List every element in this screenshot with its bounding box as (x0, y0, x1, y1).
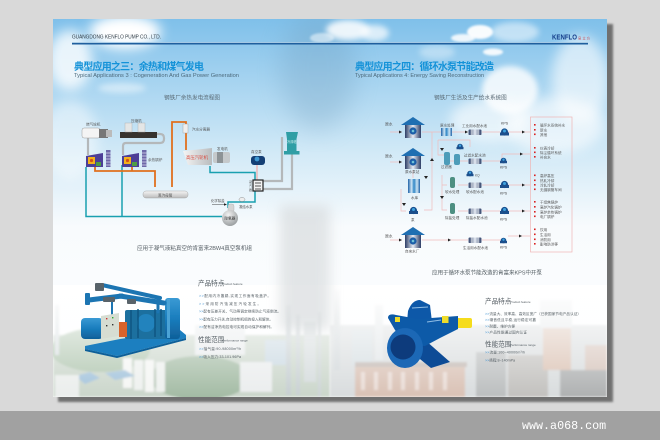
watermark url: www.a068.com (522, 419, 606, 433)
steam separator (183, 124, 210, 133)
small booster pumps: KQ (475, 174, 480, 178)
reservoir: 水库 (411, 195, 419, 200)
steam turbine: 高压汽轮机 (186, 154, 209, 161)
heading: right page: Typical Applications 4: Energy Saving Reconstruction (355, 73, 484, 79)
text block: product features, right: >>流量大、效率高、高效区宽广（已获国家节电产品认证） (485, 311, 581, 316)
chemical makeup water: 化学除盐 (211, 198, 225, 203)
spine shading (280, 10, 356, 130)
distribution pools: 除盐水配水池 (466, 215, 488, 220)
control cabinet (101, 313, 119, 339)
main body (388, 314, 458, 346)
deaerator: 除氧器 (224, 216, 236, 220)
source labels (385, 122, 393, 238)
photo: vacuum pump unit (81, 283, 186, 358)
steam turbine (183, 148, 212, 165)
KPS pumps: KPS (500, 246, 508, 250)
caption: left: 应用于凝气液粘真空的肯富来2BW4真空泵机组 (137, 244, 252, 252)
KPS pumps: KPS (500, 218, 508, 222)
generator: 发电机 (217, 146, 228, 151)
chemical makeup water (211, 198, 227, 206)
text block: product features, right: >>噪音低且平稳,运行稳定可靠 (485, 317, 536, 322)
condenser: 汽 (249, 183, 252, 188)
end user box (530, 117, 572, 252)
end user box: 高炉余热锅炉 (540, 210, 562, 214)
haze over city (53, 285, 607, 397)
cooling tower (284, 132, 300, 154)
distribution pools: 软水配水池 (466, 189, 484, 194)
diagram title: right: 钢铁厂生活及生产给水系统图 (434, 94, 507, 102)
steam header: 蒸汽母管 (158, 192, 173, 197)
upper casing (407, 300, 432, 322)
condenser (249, 179, 263, 192)
text block: product features, right: 产品特点 (485, 296, 512, 306)
intake houses: 原水泵站 (405, 169, 420, 174)
logo tagline: 泉 立 方 (578, 36, 591, 40)
text block: product features, left: 性能范围 (198, 335, 225, 344)
cooling tower: 冷却塔 (287, 139, 297, 144)
end user box: 高炉汽化锅炉 (540, 204, 562, 210)
raw water treatment (440, 122, 455, 136)
intake houses (401, 117, 425, 254)
brochure spread (42, 10, 608, 400)
text block: product features, right: >>耐磨、维护方便 (485, 324, 515, 328)
text block: product features, right: >>产品性能通过国内认证 (485, 330, 527, 334)
pipe flange (85, 293, 90, 305)
text block: product features, left: >>配用内冷靠蜗,实现工作面有吸盖护。 (199, 293, 271, 298)
valves (95, 283, 104, 291)
compressor (120, 118, 157, 138)
gas turbine: 燃气轮机 (86, 122, 101, 126)
pump casing (125, 310, 167, 339)
softening and desalination tanks: 除盐处理 (445, 215, 460, 220)
distribution pools (462, 123, 489, 250)
end user box: 电厂锅炉 (540, 214, 555, 219)
heading: left page: Typical Applications 3 : Cogeneration And Gas Power Generation (74, 73, 239, 79)
vacuum pump (251, 149, 265, 180)
coupling (119, 322, 127, 337)
text block: product features, left: Product feature (222, 282, 243, 286)
end user box: 补充水 (540, 154, 551, 160)
sky background (53, 19, 607, 397)
teal feedwater lines (86, 165, 255, 216)
deaerator (222, 204, 238, 226)
diagram title: left: 钢铁厂余热发电流程图 (164, 94, 220, 102)
end user box: 冷轧冷却 (540, 182, 555, 188)
steam header (143, 191, 188, 198)
KPS pumps: KPS (500, 192, 508, 196)
text block: product features, left: >> 采用防汽蚀减压汽轮发生。 (199, 301, 261, 306)
source labels: 原水 (385, 154, 393, 158)
text block: product features, right: >>扬程:8~140mPa (485, 358, 515, 362)
text block: product features, right (485, 296, 581, 362)
KPS pumps (500, 122, 509, 250)
text block: product features, right: Performance range (510, 343, 536, 347)
heading: right page (355, 60, 494, 79)
condenser: 凝 (249, 179, 252, 184)
generator (213, 146, 230, 163)
text block: product features, left: Performance range (222, 338, 248, 342)
text block: product features, left: >>配有压力开关,自动控制机组的投入和解体。 (199, 316, 273, 321)
photo: KPS split-case pump (387, 300, 472, 368)
header: right page (330, 34, 591, 44)
bottom band (0, 411, 660, 440)
filters: 过滤器 (441, 164, 452, 169)
reservoir pump (409, 207, 418, 222)
header rule (330, 42, 588, 44)
end user box: 循环水系统补水 (540, 122, 566, 128)
page drop shadow (58, 24, 613, 402)
end user box: 饮用 (540, 227, 548, 232)
caption: right: 应用于循环水泵节能改造的肯富来KPS中开泵 (432, 268, 542, 276)
source labels: 原水 (385, 234, 393, 238)
end user box: 影响防洪等 (540, 242, 558, 246)
separator tank (165, 298, 180, 339)
logo: KENFLO (552, 34, 577, 42)
heading: left page (74, 60, 239, 79)
end user box: 消防用 (540, 237, 551, 242)
highlights (412, 307, 441, 322)
grey wash on left page edge (280, 205, 330, 330)
text block: product features, left: >>吸入压力:33-101.96Pa (199, 354, 241, 359)
end user box: 除尘循环系统 (540, 150, 562, 155)
small booster pumps (456, 144, 480, 178)
vacuum pump: 真空泵 (251, 149, 262, 154)
intake houses: 自来水厂 (405, 248, 420, 254)
softening and desalination tanks (445, 177, 460, 220)
text block: product features, right: 性能范围 (485, 340, 512, 348)
flow arrows (399, 130, 525, 242)
text block: product features, left: >>抽气量:90-98000m³/h (199, 346, 241, 351)
motor (81, 318, 103, 339)
raw water treatment: 原水处理 (440, 122, 455, 128)
text block: product features, left (198, 278, 281, 359)
city backdrop: right page (330, 307, 607, 397)
end user box: 新水 (540, 128, 548, 132)
upper pipes (89, 285, 164, 315)
feet (415, 340, 450, 368)
heat recovery boilers (86, 150, 163, 167)
heading: left page: 典型应用之三：余热和煤气发电 (74, 60, 204, 73)
end user box: 仪表冷却 (540, 146, 555, 150)
reservoir (408, 179, 420, 200)
end user box: 干熄焦锅炉 (540, 200, 558, 204)
softening and desalination tanks: 软水处理 (445, 189, 460, 194)
end user box: 高炉高压 (540, 173, 555, 178)
heat recovery boilers: 余热锅炉 (148, 157, 163, 162)
pink pipe lines (390, 132, 530, 240)
filters (441, 152, 460, 169)
process diagram: water system (385, 117, 572, 254)
distribution pools: 生活用水配水池 (463, 245, 489, 250)
gas turbine (82, 122, 112, 138)
condenser: 器 (249, 188, 252, 192)
text block: product features, right: Product feature (510, 300, 531, 304)
compressor: 压缩机 (131, 118, 142, 123)
end user box: 热轧冷却 (540, 178, 555, 183)
grey gas pipes (88, 134, 292, 189)
steam separator: 汽水分离器 (192, 126, 210, 132)
distribution pools: 工业用水配水池 (462, 123, 488, 128)
base frame (85, 330, 186, 356)
text block: product features, right: >>流量:100~40000m³/h (485, 350, 525, 354)
text block: product features, left: >>配有洁净热电控电可实现自动保护和解列。 (199, 324, 274, 329)
condensate pump (239, 198, 253, 209)
yellow guards (442, 316, 448, 323)
distribution pools: 过滤水配水池 (464, 152, 486, 158)
source labels: 原水 (385, 122, 393, 126)
end user box: 生活用 (540, 232, 551, 237)
suction flange (387, 328, 423, 368)
process diagram: waste heat power (82, 118, 300, 226)
city backdrop: left page (53, 314, 330, 397)
text block: product features, left: 产品特点 (198, 278, 225, 288)
clouds (42, 15, 608, 180)
company name: GUANGDONG KENFLO PUMP CO., LTD. (72, 34, 161, 40)
yellow shaft (456, 318, 472, 328)
end user box: 无缝钢管车间 (540, 187, 562, 192)
reservoir pump: 泵 (411, 217, 415, 222)
text block: product features, left: >>配有压差开关、气动等调定继续防止气液倒流。 (199, 309, 281, 314)
KPS pumps: KPS (500, 166, 508, 170)
end user box: 其他 (540, 132, 548, 137)
orange steam lines (95, 122, 186, 187)
condensate pump: 凝结水泵 (239, 204, 253, 209)
heading: right page: 典型应用之四：循环水泵节能改造 (355, 60, 494, 73)
header rule (72, 42, 330, 44)
KPS pumps: KPS (501, 122, 509, 126)
